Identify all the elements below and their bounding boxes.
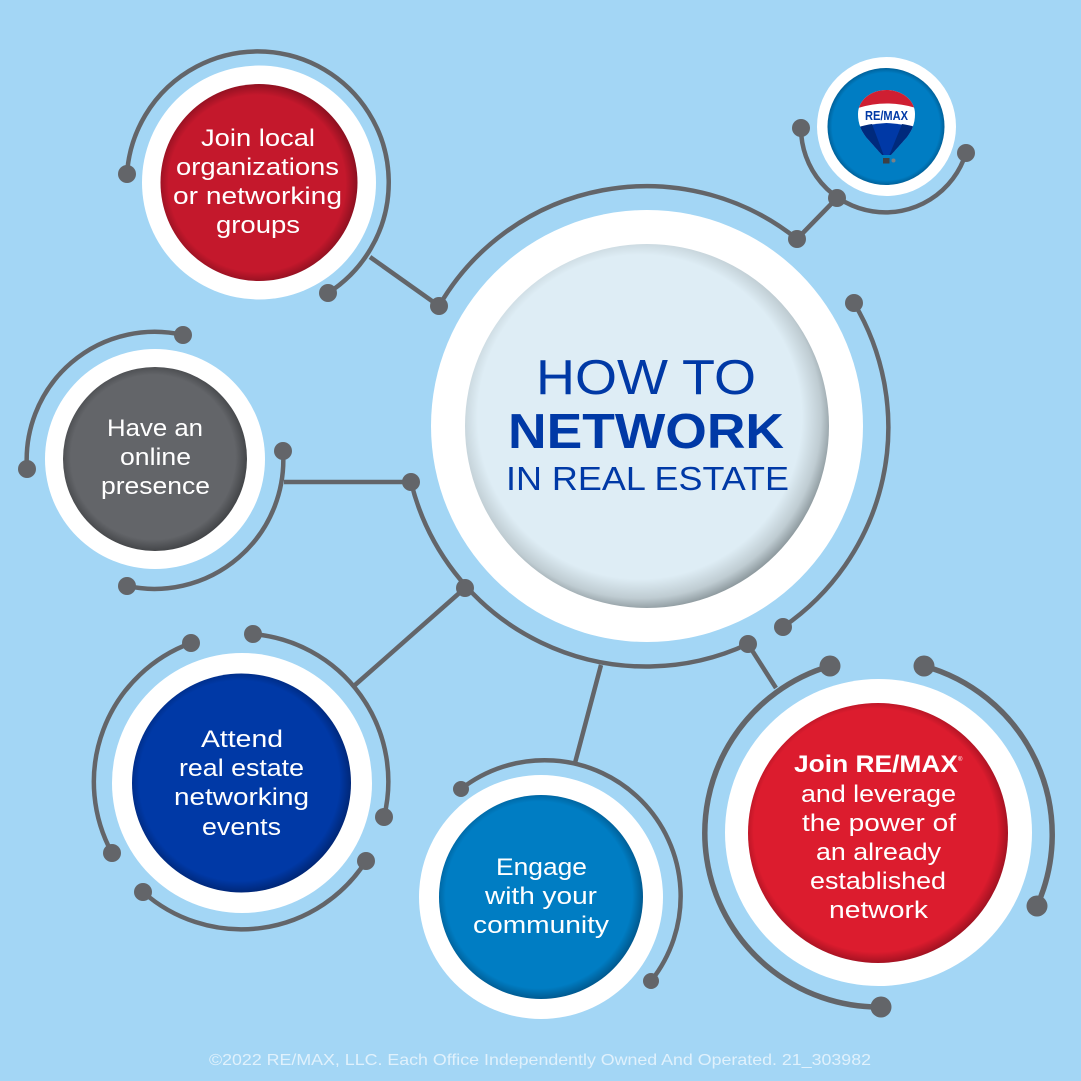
title: NETWORK bbox=[508, 405, 784, 459]
text: join RE/MAX: network bbox=[829, 897, 929, 924]
text: online presence: Have an bbox=[107, 415, 203, 442]
text: online presence: online bbox=[120, 444, 191, 471]
panel: join local organizations bbox=[118, 51, 389, 302]
text: join RE/MAX: an already bbox=[816, 839, 942, 866]
text: engage with community bbox=[473, 854, 610, 939]
text: join RE/MAX bbox=[794, 751, 963, 924]
text: join RE/MAX: and leverage bbox=[801, 781, 956, 808]
text: join local: groups bbox=[216, 212, 300, 239]
icon: RE/MAX balloon bbox=[858, 90, 915, 164]
text: engage with community: with your bbox=[484, 883, 597, 910]
text: join RE/MAX: ® bbox=[958, 756, 963, 763]
text: online presence: presence bbox=[101, 473, 210, 500]
panel: RE/MAX logo circle bbox=[792, 57, 975, 212]
icon: RE/MAX balloon: RE/MAX bbox=[865, 108, 908, 123]
title: HOW TO bbox=[536, 351, 756, 405]
text: join RE/MAX: the power of bbox=[802, 810, 956, 837]
panel: networking events bbox=[94, 625, 393, 929]
text: online presence bbox=[101, 415, 210, 500]
text: networking events bbox=[174, 726, 309, 841]
text: networking events: real estate bbox=[179, 755, 304, 782]
connector lines bbox=[284, 198, 837, 763]
text: join local: organizations bbox=[176, 154, 339, 181]
text: networking events: events bbox=[202, 814, 281, 841]
text: join local bbox=[173, 125, 342, 239]
text: join RE/MAX: established bbox=[810, 868, 946, 895]
title: IN REAL ESTATE bbox=[506, 461, 789, 498]
text: join RE/MAX: Join RE/MAX bbox=[794, 751, 959, 778]
footer copyright: ©2022 RE/MAX, LLC. Each Office Independently Owned And Operated. 21_303982 bbox=[209, 1052, 871, 1069]
text: engage with community: community bbox=[473, 912, 610, 939]
text: networking events: Attend bbox=[201, 726, 283, 753]
text: networking events: networking bbox=[174, 784, 309, 811]
panel: join RE/MAX bbox=[705, 656, 1052, 1018]
panel: engage with community bbox=[419, 760, 681, 1019]
central orbit arcs bbox=[402, 186, 888, 667]
panel: online presence bbox=[18, 326, 292, 595]
text: engage with community: Engage bbox=[496, 854, 587, 881]
title bbox=[506, 351, 789, 498]
panel: central title circle bbox=[431, 210, 863, 642]
text: join local: Join local bbox=[201, 125, 315, 152]
text: join local: or networking bbox=[173, 183, 342, 210]
